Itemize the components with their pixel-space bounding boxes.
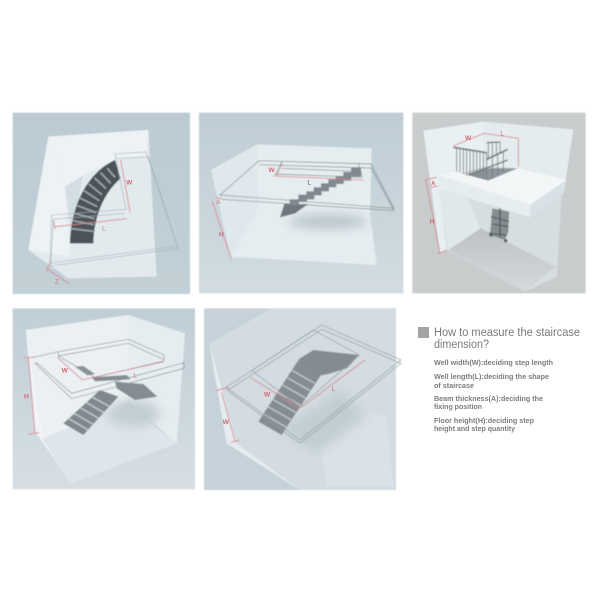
heading: dimension? bbox=[434, 339, 489, 351]
heading bbox=[434, 327, 580, 351]
panel: spiral staircase through floor slab: L bbox=[500, 130, 504, 137]
text: beam thickness: fixing position bbox=[434, 402, 482, 411]
panel: L-shaped floating staircase: W bbox=[62, 368, 69, 375]
panel: curved staircase top view: Z bbox=[55, 279, 59, 285]
heading: How to measure the staircase bbox=[434, 327, 580, 339]
panel: L-shaped floating staircase: L bbox=[133, 372, 137, 379]
panel: spiral staircase through floor slab: H bbox=[430, 218, 435, 225]
text: well length: Well length(L):deciding the shape bbox=[434, 372, 549, 381]
icon: grey square bullet bbox=[418, 327, 429, 338]
panel: curved staircase top view: W bbox=[126, 180, 133, 187]
panel: straight staircase with landing, side view: A bbox=[216, 200, 220, 206]
panel: straight staircase with landing, side view: H bbox=[219, 232, 224, 239]
panel: straight staircase with landing, side view: L bbox=[307, 180, 311, 187]
panel: straight staircase angled top view: W bbox=[264, 392, 271, 399]
text block: staircase measurement notes bbox=[418, 327, 580, 433]
panel: spiral staircase through floor slab: A bbox=[431, 180, 436, 187]
panel: curved staircase top view bbox=[13, 113, 190, 294]
panel: straight staircase with landing, side view: W bbox=[268, 167, 275, 174]
panel: L-shaped floating staircase: H bbox=[24, 394, 29, 401]
text: floor height bbox=[434, 416, 535, 433]
panel: straight staircase angled top view: L bbox=[332, 386, 336, 393]
panel: L-shaped floating staircase bbox=[13, 308, 195, 489]
text: well length: of staircase bbox=[434, 381, 474, 390]
panel: spiral staircase through floor slab bbox=[412, 113, 586, 293]
text: well width: Well width(W):deciding step length bbox=[434, 358, 553, 367]
panel: curved staircase top view: L bbox=[102, 226, 106, 233]
text: well length bbox=[434, 372, 549, 390]
text: floor height: Floor height(H):deciding step bbox=[434, 416, 535, 425]
panel: spiral staircase through floor slab: W bbox=[465, 135, 472, 142]
panel: straight staircase angled top view bbox=[204, 308, 401, 490]
text: beam thickness bbox=[434, 394, 543, 411]
panel: straight staircase angled top view: W bbox=[223, 419, 230, 426]
panel: straight staircase with landing, side view bbox=[199, 113, 403, 293]
text: floor height: height and step quantity bbox=[434, 424, 515, 433]
text: beam thickness: Beam thickness(A):deciding the bbox=[434, 394, 543, 403]
